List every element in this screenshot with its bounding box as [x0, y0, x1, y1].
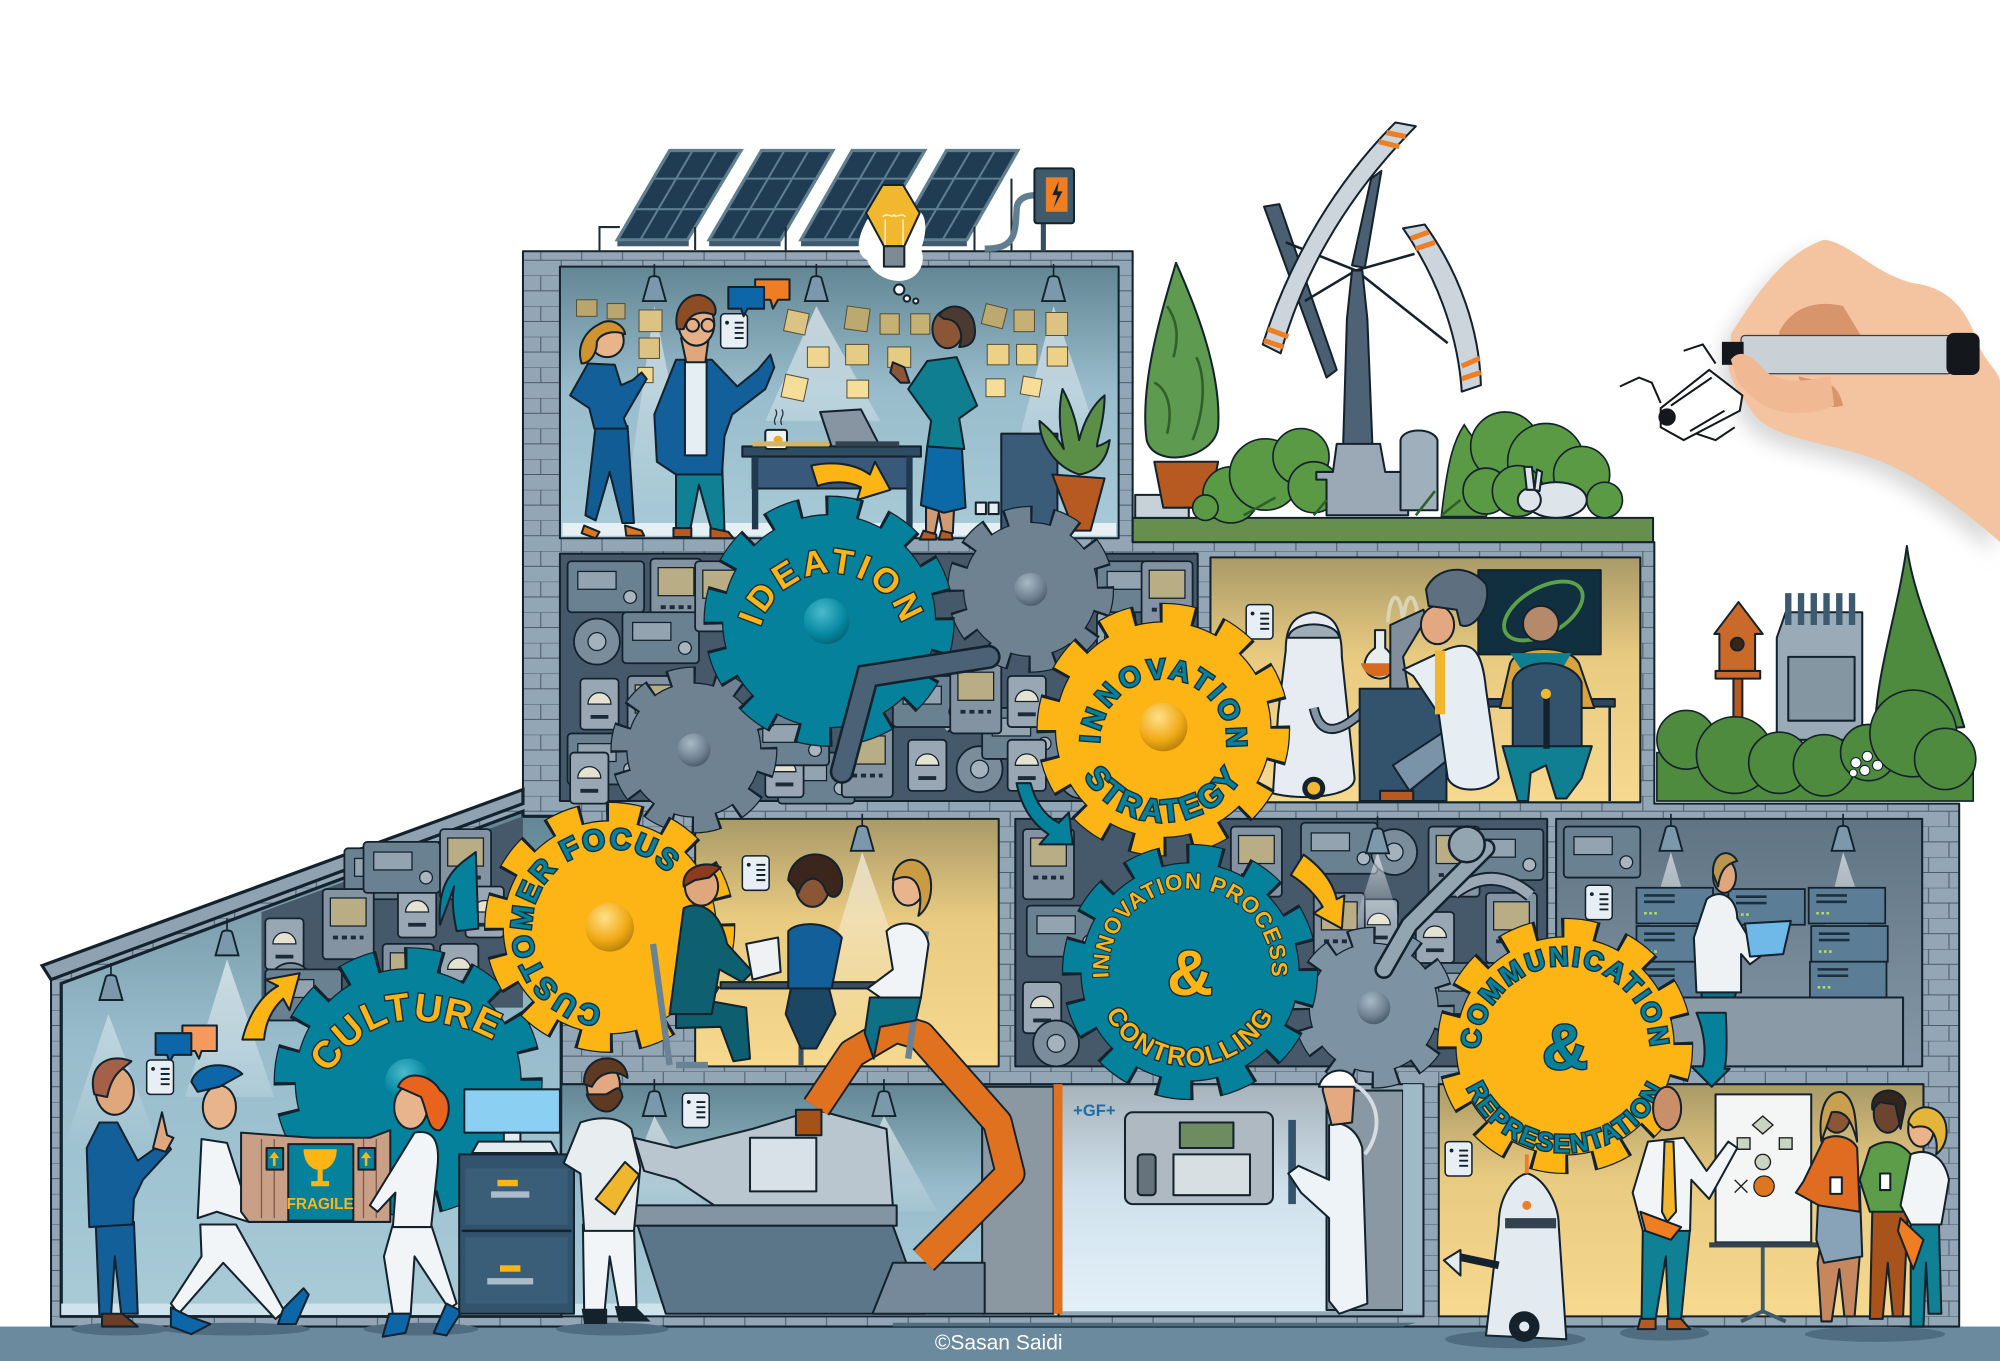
- speech bubbles: [728, 279, 790, 316]
- person: blonde woman: [865, 860, 931, 1059]
- panel: lower machinery room: [1015, 816, 1547, 1066]
- orange robot arm: [796, 1028, 1010, 1314]
- person: woman in teal: [890, 307, 977, 540]
- person: bald man on chair: [1500, 606, 1594, 801]
- control panel: [1125, 1112, 1273, 1204]
- person: bearded engineer with clipboard: [556, 1058, 668, 1335]
- person: man in green sweater: [1860, 1091, 1913, 1319]
- person: woman in blue suit: [570, 321, 647, 538]
- gear: innovation process and controlling: CONTROLLING: [1107, 1007, 1272, 1068]
- person: blonde woman in white: [1898, 1107, 1949, 1327]
- potted cypress: [1145, 263, 1218, 508]
- person: woman in orange: [1796, 1092, 1862, 1321]
- solar panels: [599, 151, 1018, 251]
- arrow: communication down: [1691, 1013, 1730, 1087]
- electrical box: [985, 168, 1074, 251]
- panel: upper machinery room: [560, 554, 1198, 804]
- sketched drone drawing: [1620, 344, 1742, 440]
- rabbit: [1518, 467, 1587, 518]
- arrow: process to next: [1291, 855, 1344, 929]
- gear: innovation strategy: [1036, 602, 1290, 856]
- thermostat lower left: [147, 1060, 173, 1094]
- panel: cleanroom: +GF+: [1073, 1101, 1116, 1120]
- gear: culture: CULTURE: [312, 991, 504, 1070]
- robot assistant: [1444, 1154, 1585, 1348]
- ground: [0, 1327, 2000, 1361]
- crate labelled fragile: FRAGILE: [287, 1196, 354, 1213]
- gear: customer focus: CUSTOMER FOCUS: [509, 827, 680, 1026]
- gear: ideation: [703, 496, 955, 747]
- arrow: to ideation: [811, 462, 890, 500]
- chalkboard: [1478, 569, 1601, 654]
- sticky notes: [577, 300, 1068, 401]
- slanted roof: [42, 790, 523, 980]
- panel: ideation room: [560, 264, 1119, 540]
- roof garden: [1133, 122, 1653, 542]
- person: presenter: [1620, 1087, 1737, 1341]
- person: man with cap carrying crate: [162, 1065, 310, 1335]
- icon: idea light bulb in thought cloud: [859, 185, 925, 304]
- gear: innovation process and controlling: INNOVATION PROCESS: [1092, 872, 1288, 978]
- birdhouse: [1714, 602, 1763, 721]
- panel: server room: [1556, 814, 1922, 1066]
- person: woman in blue with curls: [786, 854, 842, 1048]
- building walls: [51, 251, 1959, 1327]
- socket: [976, 503, 999, 514]
- gear: innovation strategy: INNOVATION: [1078, 657, 1248, 748]
- gear: innovation process and controlling: [1062, 844, 1318, 1100]
- gear: innovation process and controlling: &: [1167, 937, 1213, 1009]
- panel: presentation room: [1439, 1084, 1923, 1321]
- gear: communication and representation: REPRESENTATION: [1465, 1079, 1661, 1154]
- panel: attic culture room: [61, 811, 561, 1316]
- gear: communication and representation: COMMUNICATION: [1460, 946, 1670, 1048]
- counter: [1671, 997, 1903, 1066]
- transformer: [1777, 593, 1862, 740]
- hand with marker pen drawing a machine: [1721, 240, 2000, 552]
- computer on filing cabinet: [459, 1089, 574, 1314]
- gear: culture: [274, 947, 543, 1216]
- gear: customer focus: [484, 802, 736, 1053]
- panel: science lab room: [1210, 557, 1640, 802]
- wind turbine base machine: [1244, 430, 1460, 515]
- lab robot: [1273, 612, 1362, 800]
- ground shadows: [893, 1323, 1416, 1327]
- lab bench: [1360, 689, 1615, 801]
- arrow: culture to customer focus: [242, 973, 300, 1040]
- speech bubbles lower left: [156, 1026, 217, 1063]
- grey background gears: [620, 515, 1445, 1079]
- grey robot arm on ideation: [842, 657, 989, 772]
- plant: [1040, 389, 1110, 531]
- copyright: ©Sasan Saidi: [935, 1332, 1063, 1355]
- flowers: [1849, 751, 1883, 777]
- person: scientist: [1380, 570, 1499, 801]
- grey door: [982, 1087, 1054, 1314]
- bushes: [1657, 690, 1976, 801]
- wind turbine: [1263, 122, 1481, 446]
- robot arm on lower machinery: [1384, 827, 1486, 969]
- server racks: [1636, 888, 1888, 997]
- attic machinery: [261, 816, 523, 1020]
- right garden: [1657, 546, 1976, 801]
- person: cleanroom worker: [1288, 1070, 1377, 1314]
- gear: communication and representation: [1436, 918, 1694, 1174]
- gear: ideation: IDEATION: [736, 546, 924, 627]
- arrow: customer focus teal: [440, 852, 478, 931]
- gear: innovation strategy: STRATEGY: [1085, 762, 1238, 824]
- moulding machine: [631, 1110, 925, 1314]
- person: man in teal suit: [670, 864, 781, 1061]
- gear: communication and representation: &: [1542, 1011, 1588, 1083]
- cypress tree: [1875, 546, 1964, 733]
- panel: cleanroom: [1054, 1084, 1423, 1316]
- meeting: table and people: [653, 854, 931, 1065]
- flask and glassware: [1360, 598, 1426, 744]
- filing cabinet: [1001, 434, 1057, 531]
- person: woman with orange hair carrying crate: [364, 1076, 478, 1337]
- group: three listeners: [1796, 1091, 1949, 1342]
- panel: production machine room: [561, 1028, 1059, 1316]
- desk with laptop and mug: [742, 409, 921, 529]
- crate labelled fragile: [241, 1130, 390, 1222]
- arrow: strategy to process: [1017, 783, 1073, 844]
- server room technician: [1694, 853, 1791, 997]
- person: man pointing: [71, 1058, 173, 1335]
- flipchart: [1709, 1094, 1818, 1321]
- bushes: [1193, 412, 1622, 523]
- person: man with glasses: [654, 295, 774, 538]
- panel: customer focus meeting room: [695, 814, 999, 1066]
